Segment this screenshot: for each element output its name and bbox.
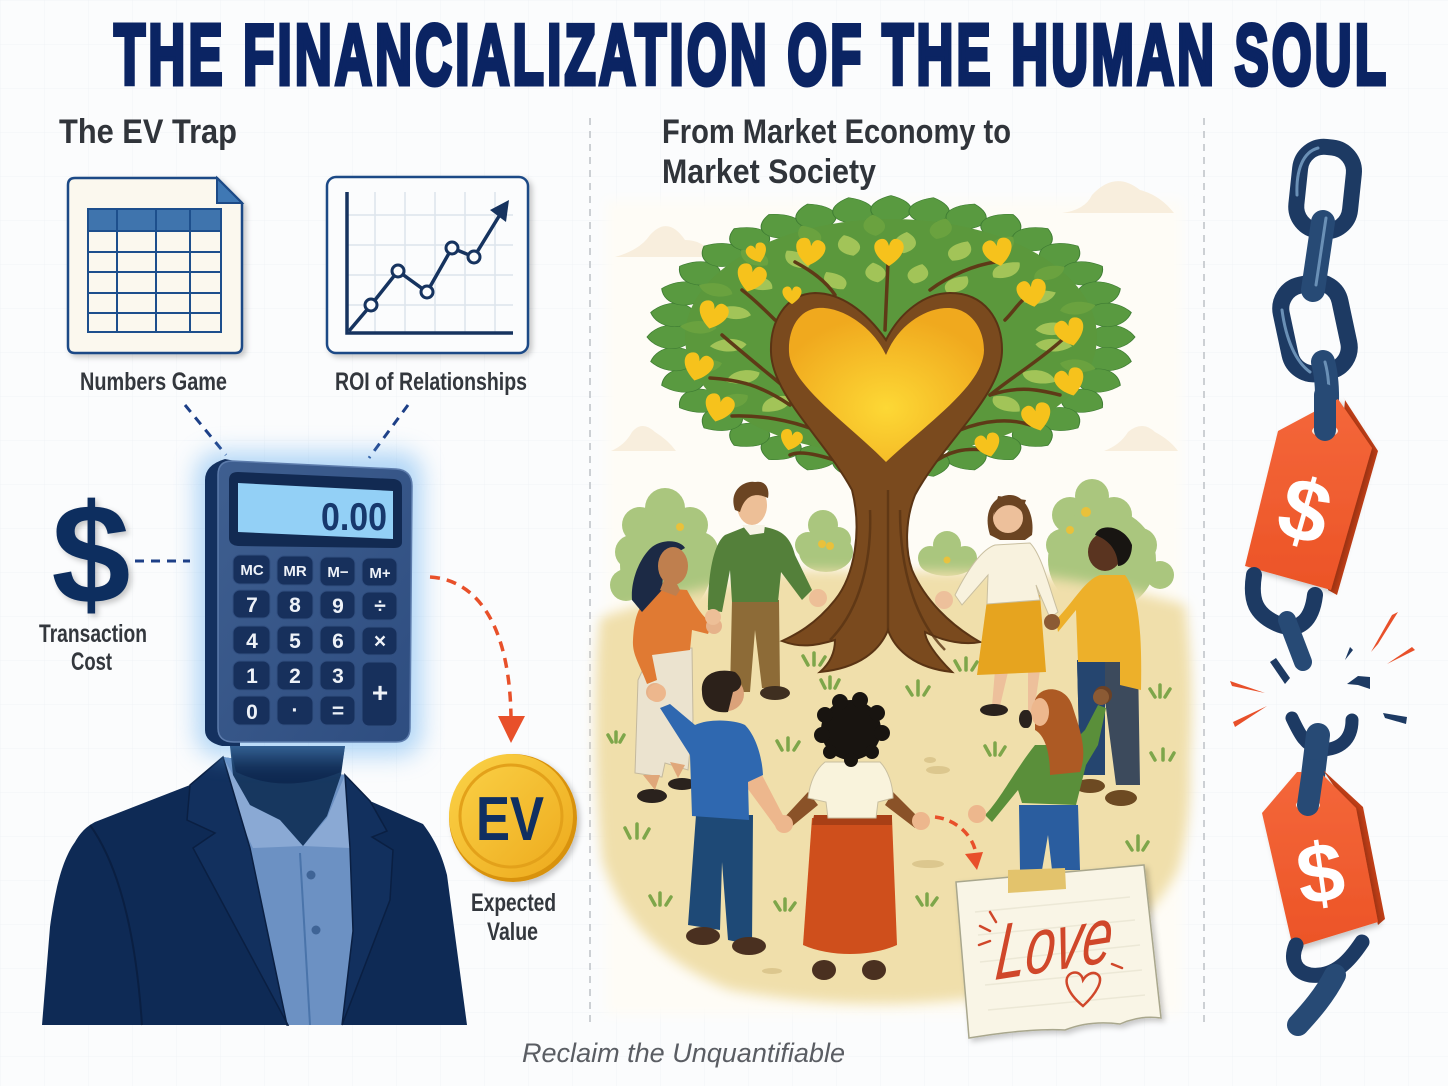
panel: market society <box>595 113 1192 1038</box>
calculator keys: 5 <box>289 630 301 653</box>
sparks <box>1230 612 1415 727</box>
calculator keys <box>233 555 397 726</box>
calculator keys: M− <box>327 564 349 581</box>
label: Transaction Cost: Transaction <box>39 620 147 648</box>
calculator keys: ÷ <box>374 595 386 618</box>
calculator keys: 8 <box>289 594 301 617</box>
icon: EV coin: EV <box>476 785 544 854</box>
heading: From Market Economy to Market Society <box>662 113 1011 191</box>
clouds <box>611 181 1178 451</box>
icon: EV coin <box>449 754 577 882</box>
calculator keys: = <box>332 700 344 723</box>
label: ROI of Relationships: ROI of Relationships <box>335 368 527 396</box>
figure: man in suit <box>42 746 467 1025</box>
icon: spreadsheet <box>68 178 242 353</box>
arrow: circle gap to love note <box>935 817 983 870</box>
chain: broken lower link of upper section <box>1253 575 1315 662</box>
connector: ROI to calculator <box>369 405 408 458</box>
price tag: lower: $ <box>1291 823 1350 923</box>
price tag: lower <box>1262 770 1385 948</box>
person: man in blue shirt <box>648 671 788 955</box>
calculator keys: × <box>374 630 386 653</box>
person: woman in white blouse and yellow skirt <box>935 495 1058 728</box>
tree <box>647 195 1135 672</box>
arrow: calculator to EV <box>430 577 525 743</box>
tape <box>1008 868 1066 893</box>
calculator keys: MC <box>240 562 264 579</box>
title: THE FINANCIALIZATION OF THE HUMAN SOUL <box>114 8 1386 102</box>
label: Expected Value <box>471 889 556 946</box>
label: Numbers Game: Numbers Game <box>80 368 227 396</box>
calculator keys: M+ <box>369 565 391 582</box>
neck <box>230 746 345 846</box>
panel: the EV trap <box>39 113 577 1025</box>
label: Expected Value: Value <box>487 918 538 946</box>
heading: From Market Economy to Market Society: From Market Economy to <box>662 113 1011 151</box>
calculator keys: · <box>292 699 298 722</box>
chain: lower hook <box>1292 718 1352 800</box>
calculator keys: 6 <box>332 630 344 653</box>
price tag: upper: $ <box>1268 456 1342 565</box>
chain: upper links <box>1276 144 1356 428</box>
tree trunk and heart frame <box>771 293 1002 672</box>
collar <box>223 757 303 848</box>
chain fragments <box>1270 647 1407 724</box>
jacket <box>42 757 467 1025</box>
person: man in yellow hoodie <box>1044 527 1141 806</box>
calculator keys: 4 <box>246 630 258 653</box>
shirt <box>223 757 353 1025</box>
calculator keys: 3 <box>332 665 344 688</box>
panel: breaking the chain <box>1230 144 1415 1025</box>
price tag: upper <box>1245 395 1378 595</box>
person: man in green sweater <box>705 482 827 700</box>
tree canopy <box>647 195 1135 479</box>
icon: dollar sign: $ <box>52 475 130 634</box>
note: Love <box>956 865 1161 1038</box>
calculator display: 0.00 <box>321 496 387 539</box>
person: woman in green top <box>968 689 1109 870</box>
connector: numbers game to calculator <box>185 405 226 455</box>
connector: dollar to calculator <box>135 560 190 562</box>
calculator display <box>229 472 402 548</box>
tree branches <box>710 262 1062 465</box>
note: Love: Love <box>992 889 1117 997</box>
heading: The EV Trap: The EV Trap <box>59 113 237 151</box>
bushes <box>610 479 1174 617</box>
calculator keys: MR <box>283 563 307 580</box>
icon: ROI line chart <box>327 177 528 353</box>
chain: bottom link <box>1294 942 1362 1025</box>
calculator keys: 9 <box>332 595 344 618</box>
grass tufts <box>608 653 1174 910</box>
calculator keys: 2 <box>289 665 301 688</box>
person: woman in white top and red skirt <box>775 692 930 980</box>
calculator keys: 1 <box>246 665 258 688</box>
calculator keys: + <box>372 677 388 708</box>
calculator keys: 0 <box>246 701 258 724</box>
golden heart <box>789 308 984 462</box>
person: woman in orange top <box>632 541 722 803</box>
label: Transaction Cost: Cost <box>71 648 112 676</box>
small yellow hearts <box>680 236 1088 460</box>
label: Expected Value: Expected <box>471 889 556 917</box>
calculator keys: 7 <box>246 594 258 617</box>
people in a circle <box>632 482 1141 980</box>
ground <box>595 570 1192 1004</box>
lapels <box>187 757 288 1025</box>
label: Transaction Cost <box>39 620 147 676</box>
icon: calculator head <box>196 452 422 756</box>
heading: From Market Economy to Market Society: Market Society <box>662 153 876 191</box>
footer caption: Reclaim the Unquantifiable <box>522 1038 845 1068</box>
